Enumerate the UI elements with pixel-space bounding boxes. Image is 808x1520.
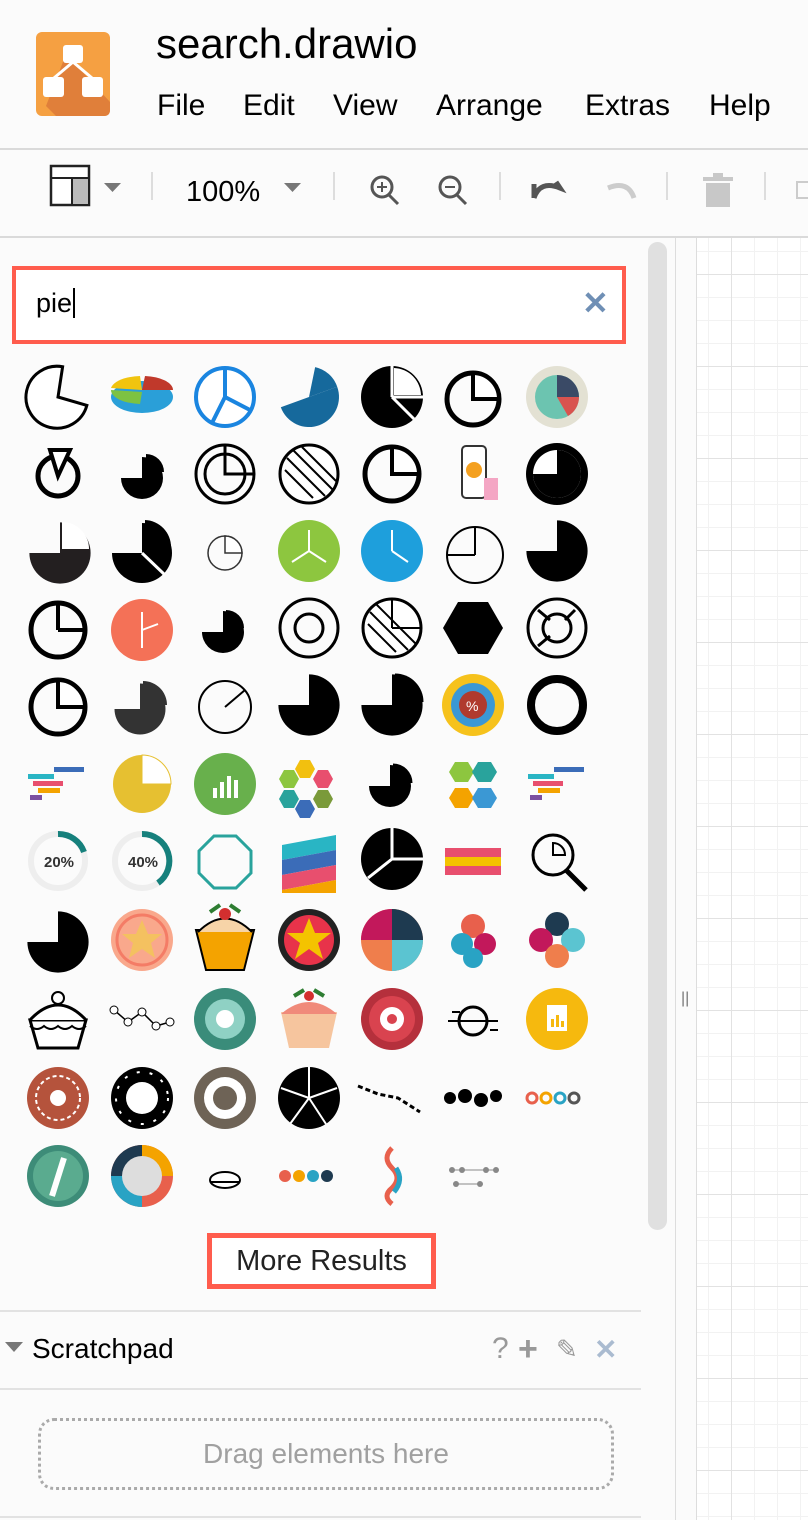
- title: search.drawio: [156, 20, 417, 67]
- panel divider: [675, 238, 676, 1520]
- menu bar: Edit: [243, 89, 295, 122]
- row 6: [28, 753, 584, 818]
- scratchpad header: ✕: [594, 1334, 617, 1365]
- header: [0, 0, 808, 150]
- scratchpad header: +: [518, 1330, 538, 1368]
- row 8: [27, 905, 585, 973]
- search box: pie: [36, 288, 72, 318]
- icon: zoom out: [440, 177, 466, 204]
- scrollbar: [648, 242, 667, 1230]
- scratchpad header: Scratchpad: [32, 1333, 174, 1364]
- splitter handle: ||: [681, 990, 689, 1007]
- drop zone: [38, 1418, 614, 1490]
- menu bar: Extras: [585, 89, 670, 122]
- toolbar: [0, 150, 808, 238]
- divider: [0, 1388, 641, 1390]
- menu bar: [157, 89, 771, 122]
- scratchpad header: ✎: [556, 1334, 578, 1364]
- row 5: [31, 674, 583, 736]
- menu bar: View: [333, 89, 397, 122]
- row 2: [38, 443, 588, 505]
- scratchpad header: [5, 1330, 617, 1368]
- icons: scratchpad actions: ?: [492, 1332, 509, 1365]
- icon: zoom in: [372, 177, 398, 204]
- divider: [0, 1310, 641, 1312]
- icon: clear: ✕: [582, 285, 609, 321]
- row 1: [17, 358, 588, 437]
- icon: format panel: [51, 166, 121, 205]
- menu bar: Arrange: [436, 89, 543, 122]
- toolbar: 100%: [186, 176, 260, 208]
- menu bar: Help: [709, 89, 771, 122]
- search box: [12, 266, 626, 344]
- more results button: [207, 1233, 436, 1289]
- more results button: More Results: [236, 1245, 407, 1277]
- row 9: [30, 988, 588, 1050]
- row 4: [31, 599, 586, 661]
- row 7: 40%: [128, 854, 158, 871]
- row 11: [27, 1145, 499, 1207]
- row 10: [27, 1067, 579, 1129]
- drop zone: Drag elements here: [203, 1438, 449, 1469]
- menu bar: File: [157, 89, 205, 122]
- icon: drawio logo: [36, 32, 110, 116]
- icon grid: search results: [24, 364, 588, 1207]
- canvas with grid: [696, 238, 808, 1520]
- row 7: 20%: [44, 854, 74, 871]
- row 7: [31, 828, 586, 893]
- row 3: [29, 520, 588, 584]
- row 5: %: [466, 698, 478, 714]
